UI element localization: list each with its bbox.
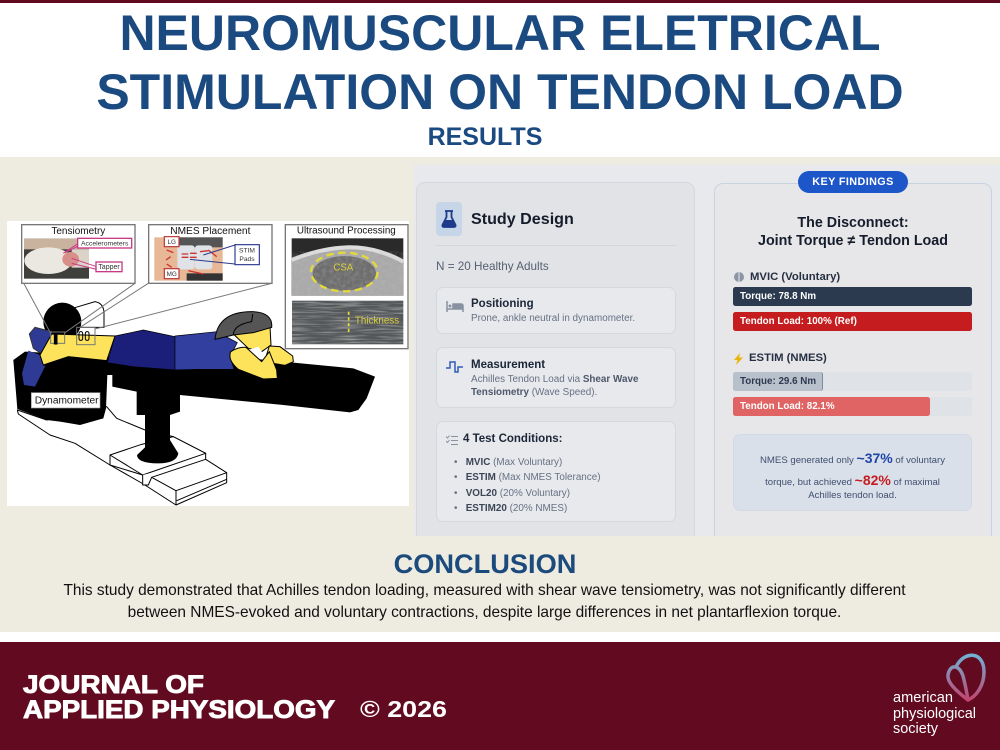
panel: experimental setup figure <box>7 221 409 506</box>
list: conditions: • ESTIM (Max NMES Tolerance) <box>454 472 601 483</box>
screenshot backdrop <box>414 165 1000 536</box>
inset: NMES placement: STIM <box>239 247 255 254</box>
title <box>96 5 904 151</box>
base outline <box>17 407 227 505</box>
inset: ultrasound processing: Thickness <box>355 316 399 327</box>
heading: the disconnect: The Disconnect: <box>797 215 909 231</box>
hair <box>215 312 272 339</box>
legs: dark blue <box>107 330 175 370</box>
bar: mvic tendon load <box>733 312 972 331</box>
bar: estim tendon track <box>733 397 972 416</box>
foot <box>29 327 52 353</box>
card: positioning <box>436 287 676 334</box>
list: conditions: • MVIC (Max Voluntary) <box>454 457 562 468</box>
inset: NMES placement <box>149 225 272 283</box>
society name: society <box>893 721 939 737</box>
inset: ultrasound processing: CSA <box>333 262 354 273</box>
text: conclusion body: This study demonstrated that Achilles tendon loading, measured with shear wave tensiometry, was not significantly different <box>63 582 906 599</box>
inset: tensiometry: Accelerometers <box>81 240 129 247</box>
journal wordmark <box>23 671 335 724</box>
illustration: participant on dynamometer <box>13 224 409 506</box>
badge: key findings <box>798 171 908 193</box>
title line 2: STIMULATION ON TENDON LOAD <box>96 64 904 120</box>
inset: tensiometry <box>22 225 135 283</box>
society name <box>893 690 976 737</box>
panel: study design <box>416 182 695 536</box>
heading: test conditions: 4 Test Conditions: <box>463 433 562 445</box>
heading: measurement: Measurement <box>471 359 545 371</box>
white gap by hands <box>248 347 263 357</box>
icon: flask <box>436 202 462 236</box>
inset: ultrasound processing <box>285 225 408 349</box>
callout leader lines <box>22 279 272 345</box>
inset: tensiometry: Tapper <box>98 264 120 271</box>
lower blue foot <box>22 351 45 387</box>
subtitle: results: RESULTS <box>428 123 542 151</box>
icon: bed <box>446 301 464 312</box>
heading: study design: Study Design <box>471 210 574 228</box>
torso: blue <box>175 332 237 370</box>
callout line 2: torque, but achieved ~82% of maximal <box>765 472 940 488</box>
icon: lightning <box>734 353 743 365</box>
heading: estim: ESTIM (NMES) <box>749 352 827 364</box>
card: test conditions <box>436 421 676 522</box>
bar: estim torque fill <box>733 372 823 391</box>
icon: brain <box>734 272 744 282</box>
bar: estim torque fill: Torque: 29.6 Nm <box>740 376 816 387</box>
society logo mark <box>948 655 984 700</box>
heading: positioning: Positioning <box>471 298 534 310</box>
callout line 3: Achilles tendon load. <box>808 490 897 501</box>
inset: NMES placement: Pads <box>239 256 255 263</box>
bar: estim tendon fill: Tendon Load: 82.1% <box>740 401 835 412</box>
far arm <box>265 346 293 365</box>
copyright: © 2026 <box>360 696 447 722</box>
inset: ultrasound processing: Ultrasound Processing <box>297 226 396 237</box>
beige content band <box>0 157 1000 632</box>
title line 1: NEUROMUSCULAR ELETRICAL <box>119 5 881 61</box>
divider <box>436 245 676 246</box>
label: dynamometer: Dynamometer <box>35 396 99 407</box>
inset: NMES placement: LG <box>167 239 176 246</box>
heading: the disconnect <box>758 215 948 248</box>
text: conclusion body: between NMES-evoked and voluntary contractions, despite large differences in net plantarflexion torque. <box>128 604 841 620</box>
badge: key findings: KEY FINDINGS <box>812 176 894 188</box>
inset: NMES placement: MG <box>167 271 177 278</box>
bar: mvic torque: Torque: 78.8 Nm <box>740 291 816 302</box>
journal wordmark: APPLIED PHYSIOLOGY <box>23 696 335 724</box>
heading: conclusion: CONCLUSION <box>394 548 576 579</box>
text: measurement detail <box>471 374 638 398</box>
journal wordmark: JOURNAL OF <box>23 671 204 699</box>
panel: key findings <box>714 183 992 536</box>
text: measurement detail: Achilles Tendon Load via Shear Wave <box>471 374 638 385</box>
top accent stripe <box>0 0 1000 3</box>
near arm <box>230 347 277 379</box>
icon: checklist <box>446 435 458 445</box>
bar: mvic torque <box>733 287 972 306</box>
bar: estim tendon fill <box>733 397 930 416</box>
list: conditions: • ESTIM20 (20% NMES) <box>454 503 567 514</box>
inset: tensiometry: Tensiometry <box>51 226 105 237</box>
text: measurement detail: Tensiometry (Wave Speed). <box>471 387 597 398</box>
card: measurement <box>436 347 676 408</box>
bar: estim torque track <box>733 372 972 391</box>
society name: physiological <box>893 706 976 722</box>
heading: mvic: MVIC (Voluntary) <box>750 271 840 283</box>
inset: NMES placement: NMES Placement <box>170 226 251 237</box>
text: positioning detail: Prone, ankle neutral in dynamometer. <box>471 313 635 324</box>
text: conclusion body <box>63 582 906 620</box>
journal name and society logo <box>22 654 986 737</box>
list: conditions <box>454 457 601 514</box>
face <box>233 327 271 352</box>
dynamometer head <box>73 302 104 327</box>
list: conditions: • VOL20 (20% Voluntary) <box>454 488 570 499</box>
text: sample size: N = 20 Healthy Adults <box>436 260 549 273</box>
black table and dynamometer <box>13 352 375 463</box>
callout line 1: NMES generated only ~37% of voluntary <box>760 450 945 466</box>
leg: yellow <box>40 334 115 365</box>
callout: key takeaway <box>733 434 972 511</box>
footer band <box>0 642 1000 750</box>
icon: square wave <box>446 361 463 373</box>
heading: the disconnect: Joint Torque ≠ Tendon Load <box>758 232 948 248</box>
sensors on calf <box>54 332 89 344</box>
society name: american <box>893 690 953 706</box>
label: dynamometer <box>31 393 100 408</box>
bar: mvic tendon load: Tendon Load: 100% (Ref) <box>740 316 857 327</box>
